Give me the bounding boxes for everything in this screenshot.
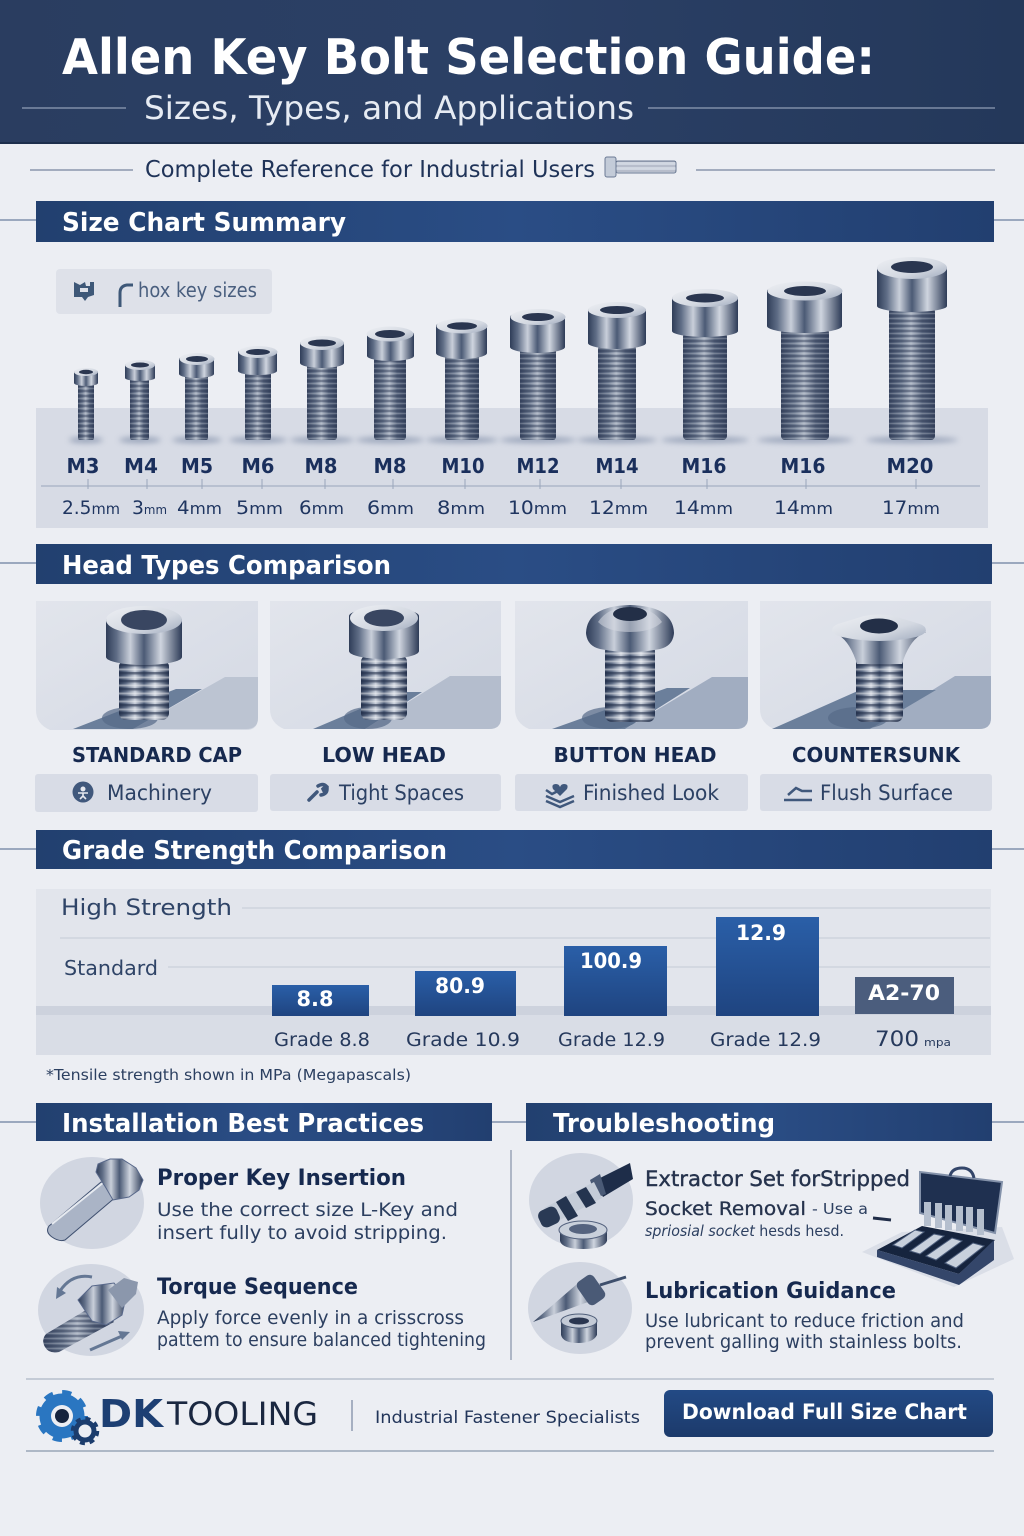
bar: 8.8: 8.8 [296, 987, 334, 1011]
item: lubrication guidance [528, 1262, 964, 1354]
icon: gears [39, 1393, 98, 1444]
bar: 12.9 tall [716, 917, 819, 1016]
title: Allen Key Bolt Selection Guide: [62, 29, 875, 86]
bolt M14 [588, 302, 646, 440]
metric size labels: M14 [596, 454, 638, 478]
heading: Proper Key Insertion [157, 1166, 406, 1191]
bolt row [69, 257, 958, 443]
use pill: machinery: Machinery [107, 781, 212, 805]
bolt M8 [300, 336, 344, 440]
heading: Torque Sequence [157, 1275, 358, 1300]
bar: A2-70 [855, 977, 954, 1014]
bar: 10.9 [415, 971, 516, 1016]
bar: A2-70: A2-70 [868, 981, 940, 1005]
panel: low head [270, 601, 501, 811]
metric size labels: M8 [304, 454, 338, 478]
body: Use lubricant to reduce friction and [645, 1310, 964, 1332]
hex key size labels: 12mm [589, 497, 648, 519]
metric size labels: M12 [516, 454, 560, 478]
grade labels: Grade 12.9 [558, 1029, 665, 1051]
hex key size labels: 8mm [437, 497, 485, 519]
inline body: - Use a [812, 1200, 868, 1218]
footer top rule [26, 1378, 994, 1380]
bolt M5 [179, 353, 214, 440]
hex key size labels: 17mm [882, 497, 940, 519]
metric size labels: M3 [66, 454, 100, 478]
hex key sizes legend [56, 269, 272, 314]
panel: countersunk [760, 601, 992, 811]
bar: 12.9 [564, 946, 667, 1016]
grade labels: mpa [924, 1036, 951, 1049]
panel: grade bar chart [36, 889, 991, 1055]
logo: DK Tooling: TOOLING [166, 1395, 318, 1433]
heading continuation: Socket Removal [645, 1198, 806, 1220]
axis label: standard: Standard [64, 956, 158, 980]
body: insert fully to avoid stripping. [157, 1222, 447, 1244]
bolt M4 [125, 360, 155, 440]
size chart floor band [36, 408, 988, 528]
footnote: *Tensile strength shown in MPa (Megapascals) [46, 1066, 411, 1084]
panel: button head [515, 601, 748, 811]
bolt M6 [238, 346, 278, 440]
grade labels: Grade 8.8 [274, 1029, 370, 1051]
use pill: flush surface [760, 774, 992, 811]
hex key size labels: 4mm [177, 497, 222, 519]
heading: Lubrication Guidance [645, 1279, 896, 1304]
use pill: tight spaces [270, 774, 501, 811]
scale axis [41, 479, 980, 489]
metric size labels [66, 454, 934, 478]
footer tagline: Industrial Fastener Specialists [375, 1408, 640, 1428]
icon: hex key in bolt [40, 1157, 144, 1249]
panel: size chart [36, 257, 988, 528]
bolt M16 [672, 289, 738, 440]
section heading: Grade Strength Comparison: Grade Strength Comparison [62, 836, 447, 866]
use pill: finished look: Finished Look [583, 781, 720, 805]
metric size labels: M10 [442, 454, 484, 478]
metric size labels: M6 [242, 454, 274, 478]
body: Apply force evenly in a crisscross [157, 1307, 464, 1329]
bolt M12 [510, 309, 566, 440]
body: Use the correct size L-Key and [157, 1199, 458, 1221]
tagline row [30, 157, 995, 183]
grade labels: Grade 10.9 [406, 1029, 520, 1051]
metric size labels: M8 [374, 454, 406, 478]
footer bottom rule [26, 1450, 994, 1452]
hex key size labels [62, 497, 940, 519]
hex key size labels: 6mm [367, 497, 414, 519]
button: download: Download Full Size Chart [682, 1400, 967, 1424]
label: LOW HEAD [322, 743, 446, 767]
section heading: Grade Strength Comparison [0, 830, 1024, 869]
logo: DK Tooling [39, 1392, 318, 1444]
hex key size labels: 10mm [508, 497, 567, 519]
grade labels: Grade 12.9 [710, 1029, 821, 1051]
use pill: tight spaces: Tight Spaces [338, 781, 464, 805]
heading: troubleshooting: Troubleshooting [553, 1109, 775, 1139]
bolt M20 [877, 257, 947, 440]
use pill: finished look [515, 774, 748, 811]
metric size labels: M16 [780, 454, 826, 478]
logo: DK Tooling: DK [99, 1392, 165, 1436]
hex key size labels: 5mm [236, 497, 283, 519]
section heading: Head Types Comparison: Head Types Comparison [62, 551, 391, 581]
hex key size labels: 2.5mm [62, 497, 120, 519]
bolt M10 [436, 318, 488, 440]
item: torque sequence [38, 1264, 486, 1356]
subtitle: Sizes, Types, and Applications [144, 89, 634, 127]
metric size labels: M20 [886, 454, 934, 478]
header banner [0, 0, 1024, 144]
bar: 12.9 tall: 12.9 [736, 921, 786, 945]
hex key size labels: 14mm [674, 497, 733, 519]
heading: installation: Installation Best Practices [62, 1109, 424, 1139]
label: COUNTERSUNK [792, 743, 961, 767]
bar: 10.9: 80.9 [435, 974, 485, 998]
item: extractor set [529, 1153, 910, 1249]
heading: Extractor Set forStripped [645, 1167, 910, 1191]
section heading: Size Chart Summary: Size Chart Summary [62, 208, 346, 238]
heading: troubleshooting [526, 1103, 992, 1141]
body line: spriosial socket hesds hesd. [645, 1222, 844, 1240]
use pill: machinery [35, 774, 258, 812]
hex key size labels: 3mm [132, 497, 167, 519]
hex key size labels: 14mm [774, 497, 833, 519]
hex key size labels: 6mm [299, 497, 344, 519]
label: STANDARD CAP [72, 743, 242, 767]
section heading: Size Chart Summary [0, 201, 1024, 242]
bar: 12.9: 100.9 [580, 949, 642, 973]
section headings: installation and troubleshooting [0, 1103, 1024, 1141]
hex key sizes legend: hox key sizes [138, 278, 257, 302]
metric size labels: M4 [124, 454, 158, 478]
bolt M16 large [767, 282, 842, 440]
metric size labels: M5 [181, 454, 213, 478]
icon: extractor bit [529, 1153, 633, 1249]
axis label: high strength: High Strength [61, 896, 232, 921]
panel: standard cap [35, 601, 258, 812]
section heading: Head Types Comparison [0, 544, 1024, 584]
item: proper key insertion [40, 1157, 458, 1249]
bolt M3 [74, 368, 98, 440]
bolt M8 large [366, 326, 414, 440]
illustration: extractor toolbox [862, 1168, 1014, 1287]
icon: small bolt [605, 157, 676, 177]
grade labels: 700 [875, 1027, 919, 1051]
bar: 8.8 [272, 985, 369, 1016]
column divider [510, 1150, 512, 1360]
icon: lubricant applicator [528, 1262, 632, 1354]
body: pattem to ensure balanced tightening [157, 1329, 486, 1351]
body: prevent galling with stainless bolts. [645, 1331, 962, 1353]
heading: installation [36, 1103, 492, 1141]
button: download [664, 1390, 993, 1437]
tagline row: Complete Reference for Industrial Users [145, 157, 595, 183]
label: BUTTON HEAD [554, 743, 716, 767]
divider [351, 1400, 353, 1431]
grade labels [274, 1027, 951, 1051]
icon: torque rotation [38, 1264, 144, 1356]
use pill: flush surface: Flush Surface [820, 781, 953, 805]
metric size labels: M16 [682, 454, 726, 478]
